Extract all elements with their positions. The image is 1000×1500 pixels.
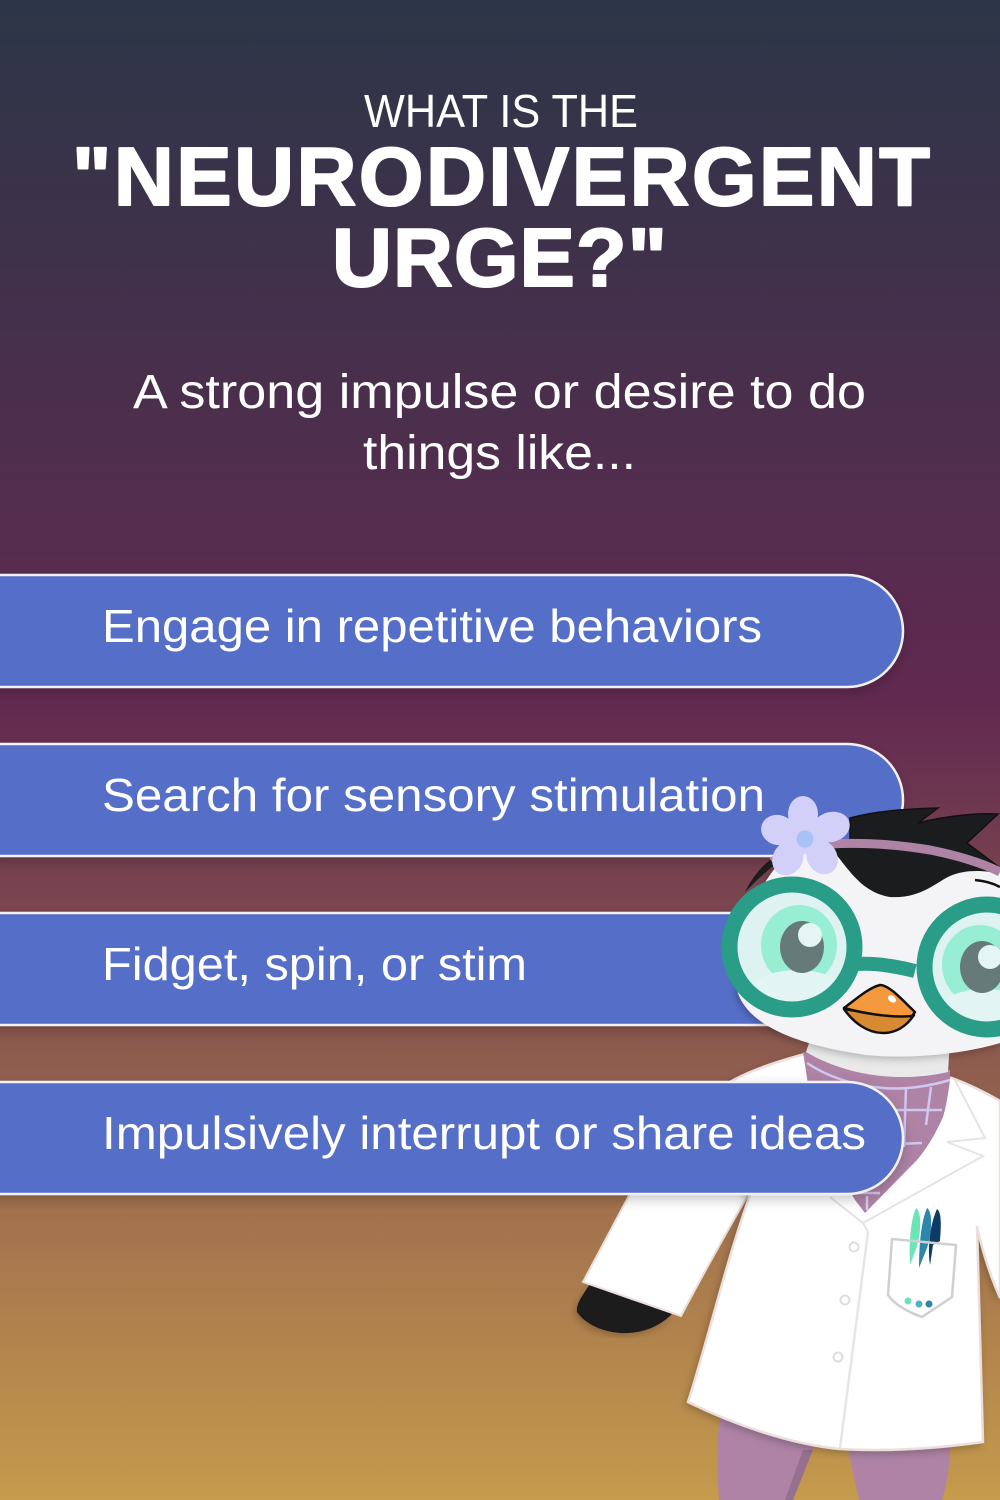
coat placket (840, 1232, 868, 1448)
subtitle: things like... (363, 427, 636, 480)
eyebrow (975, 880, 1000, 887)
neck (806, 1040, 950, 1077)
beak (844, 985, 915, 1033)
right lens (924, 904, 1000, 1030)
title: WHAT IS THE (364, 85, 638, 137)
pens (910, 1208, 941, 1268)
list item 1 (0, 575, 903, 687)
penguin scientist mascot (577, 796, 1000, 1500)
penguin legs (717, 1415, 951, 1500)
flower center (796, 830, 814, 848)
lab coat (688, 1052, 1000, 1450)
list item 4: Impulsively interrupt or share ideas (102, 1107, 866, 1159)
pocket logos (904, 1298, 932, 1308)
sweater (803, 1052, 950, 1213)
headband (772, 843, 1000, 872)
side hair (745, 860, 776, 892)
list item 4 (0, 1082, 903, 1194)
list item 3 (0, 913, 903, 1025)
coat lapels (830, 1080, 985, 1232)
flower (758, 796, 853, 881)
hair spikes (850, 808, 1000, 900)
penguin head (729, 796, 1000, 1056)
subtitle (133, 366, 866, 480)
list item 2: Search for sensory stimulation (102, 769, 765, 821)
list item 2 (0, 744, 903, 856)
subtitle: A strong impulse or desire to do (133, 366, 866, 419)
lab coat sleeve (583, 1150, 748, 1316)
beak highlight (887, 994, 897, 1004)
list item 3: Fidget, spin, or stim (102, 938, 527, 990)
head shape (737, 843, 1000, 1056)
title: "NEURODIVERGENT (72, 130, 930, 223)
glasses (730, 884, 1000, 1030)
coat buttons (834, 1242, 858, 1362)
title (72, 85, 930, 304)
left lens (729, 884, 855, 1010)
coat pocket (888, 1239, 956, 1317)
penguin hand (577, 1284, 672, 1333)
title: URGE?" (332, 211, 667, 304)
black head patch (830, 844, 990, 897)
list item 1: Engage in repetitive behaviors (102, 600, 762, 652)
